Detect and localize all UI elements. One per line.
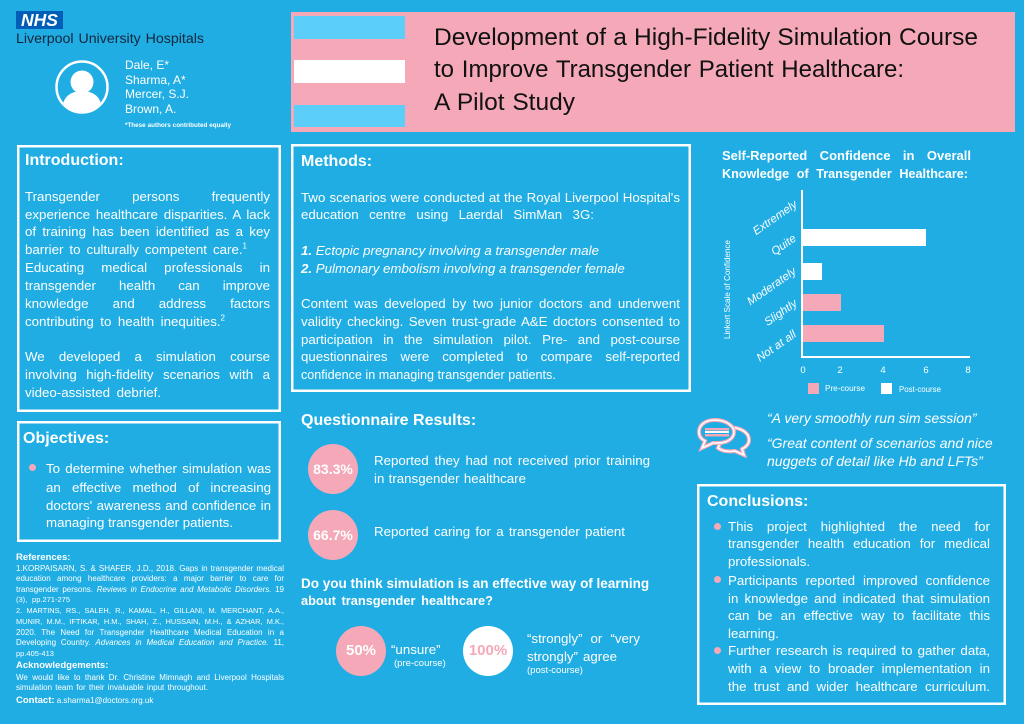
quote [767,435,993,469]
introduction text: transgender health can improve [25,278,270,293]
legend: pre-course: Pre-course [825,383,865,393]
quote: nuggets of detail like Hb and LFTs” [767,453,983,469]
stat note: (pre-course) [394,658,446,669]
stat circle [336,626,386,676]
stat: no prior training [308,444,650,494]
stat circle: 66.7% [313,527,353,543]
trust name: Liverpool University Hospitals [16,31,204,47]
introduction text: barrier to culturally competent care.1 [25,242,247,257]
conclusion text [728,519,990,569]
reference list: pp.405-413 [16,649,54,658]
acknowledgements text [16,673,284,692]
flag stripe: blue [294,105,405,127]
heading: introduction: Introduction: [25,152,124,169]
conclusion text: Participants reported improved confidence [728,573,990,588]
heading: objectives: Objectives: [23,430,109,447]
panel: methods [291,144,691,392]
chart heading [722,148,971,181]
y axis category labels [745,198,801,364]
conclusion text: the trust and wider healthcare curriculum. [728,679,990,694]
methods text: Content was developed by two junior doctors and underwent [301,296,680,311]
introduction text: knowledge and address factors [25,296,270,311]
question text [301,576,649,608]
reference list: Developing Country. Advances in Medical Education and Practice. 11, [16,638,284,647]
title text: A Pilot Study [434,89,575,116]
conclusion text: This project highlighted the need for [728,519,990,534]
stat text: “unsure” [391,642,441,657]
scenario list: 2. Pulmonary embolism involving a transgender female [301,261,625,276]
introduction text [25,189,270,400]
introduction text: contributing to health inequities.2 [25,314,225,329]
chart heading: Knowledge of Transgender Healthcare: [722,167,968,181]
author names: Sharma, A* [125,73,186,87]
y axis category labels: Not at all [755,328,799,364]
y axis category labels: Slightly [762,297,801,329]
stat text: Reported caring for a transgender patient [374,524,625,539]
author names: Brown, A. [125,102,176,116]
reference list: (3), pp.271-275 [16,595,70,604]
y axis category labels: Moderately [745,265,800,308]
objective text [46,461,271,530]
objective text: managing transgender patients. [46,515,233,530]
chart heading: Self-Reported Confidence in Overall [722,148,971,163]
stat circle: 100% [469,642,507,659]
heading: conclusions: Conclusions: [707,493,808,510]
methods text: confidence in managing transgender patients. [301,368,556,382]
question text: about transgender healthcare? [301,593,493,608]
reference list: 1.KORPAISARN, S. & SHAFER, J.D., 2018. Gaps in transgender medical [16,564,284,573]
panel: conclusions [697,484,1006,705]
author names: Mercer, S.J. [125,87,189,101]
methods text: participation in the simulation pilot. Pre- and post-course [301,332,680,347]
heading: acknowledgements: Acknowledgements: [16,660,108,671]
stat note: (post-course) [527,665,583,676]
title text: Development of a High-Fidelity Simulation Course [434,24,978,51]
conclusion text: professionals. [728,554,810,569]
heading: methods: Methods: [301,153,372,170]
stat text: Reported they had not received prior training [374,453,650,468]
stat circle: 83.3% [313,461,353,477]
axes [801,190,970,358]
bars: pre-course [803,294,884,342]
legend: post-course [881,383,941,394]
y axis category labels: Quite [769,233,799,258]
conclusion bullet [714,523,721,530]
NHS logo [16,10,204,47]
introduction text: involving high-fidelity scenarios with a [25,367,270,382]
reference list [16,564,284,658]
scenario list: 1. Ectopic pregnancy involving a transgender male [301,243,599,258]
title banner [291,12,1015,132]
stat: strongly agree post-course [463,626,640,676]
legend: pre-course [808,383,865,394]
reference list: MUNIR, M.M., IFTIKAR, H.M., SHAH, Z., HUSSAIN, M.H., & AZHAR, M.K., [16,617,284,626]
questionnaire results [301,412,650,676]
contact: Contact: a.sharma1@doctors.org.uk [16,695,153,706]
stat: unsure pre-course [336,626,446,676]
stat: strongly agree post-course: strongly” agree [527,649,617,664]
introduction text: Transgender persons frequently [25,189,270,204]
conclusion text: learning. [728,626,779,641]
flag stripe: white [294,60,405,83]
x axis tick labels: 6 [923,365,929,376]
bars: post-course [803,229,926,280]
scenario list [300,243,625,276]
x axis tick labels [800,365,971,376]
panel: introduction [17,145,281,412]
heading: references: References: [16,552,70,563]
conclusion text: transgender health education for medical [728,536,990,551]
reference list: 2. MARTINS, RS., SALEH, R., KAMAL, H., GILLANI, M. MERCHANT, A.A., [16,606,284,615]
introduction text: We developed a simulation course [25,349,270,364]
objective text: an effective method of increasing [46,480,271,495]
heading: questionnaire results: Questionnaire Results: [301,412,476,429]
x axis tick labels: 4 [880,365,886,376]
quote: “Great content of scenarios and nice [767,435,993,451]
y axis title: Linkert Scale of Confidence [722,240,732,339]
stat text: in transgender healthcare [374,471,526,486]
stat circle [308,444,358,494]
conclusion bullet [714,647,721,654]
y axis category labels: Extremely [751,198,801,238]
conclusion text: can be an effective way to facilitate this [728,608,990,623]
stat text: “strongly” or “very [527,631,640,646]
flag stripe: blue [294,16,405,39]
reference list: 2020. The Need for Transgender Healthcare Medical Education in a [16,628,284,637]
acknowledgements text: We would like to thank Dr. Christine Mimnagh and Liverpool Hospitals [16,673,284,682]
icon: speech bubbles [697,418,751,458]
introduction text: of training has been identified as a key [25,224,270,239]
conclusion text: with a view to broader implementation in [728,661,990,676]
panel: objectives [17,421,281,542]
objective bullet [29,464,36,471]
conclusion text [728,643,990,694]
introduction text: video-assisted debrief. [25,385,161,400]
references and acknowledgements [16,552,284,706]
stat circle [308,510,358,560]
introduction text: Educating medical professionals in [25,260,270,275]
author names: Dale, E* [125,58,169,72]
conclusion text [728,573,990,641]
objective text: To determine whether simulation was [46,461,271,476]
quote: “A very smoothly run sim session” [767,410,977,426]
stat circle: 50% [346,642,376,659]
scenario intro text: Two scenarios were conducted at the Royal Liverpool Hospital's [301,190,680,205]
author list [125,58,231,129]
x axis tick labels: 0 [800,365,806,376]
icon: author avatar [55,60,109,114]
reference list: education among healthcare providers: a major barrier to care for [16,574,284,583]
methods text [301,296,680,382]
conclusion text: in knowledge and indicated that simulation [728,591,990,606]
x axis tick labels: 2 [837,365,843,376]
reference list: transgender persons. Reviews in Endocrine and Metabolic Disorders. 19 [16,585,284,594]
acknowledgements text: simulation team for their invaluable input throughout. [16,683,208,692]
title text: to Improve Transgender Patient Healthcare: [434,56,904,83]
x axis tick labels: 8 [965,365,971,376]
stat text [374,453,650,486]
scenario intro text: education centre using Laerdal SimMan 3G: [301,207,594,222]
stat: cared for a transgender patient [308,510,625,560]
methods text: validity checking. Seven trust-grade A&E doctors consented to [301,314,680,329]
participant quotes [767,410,993,469]
question text: Do you think simulation is an effective way of learning [301,576,649,591]
methods text: questionnaires were completed to compare self-reported [301,349,680,364]
author names [125,58,189,116]
stat circle [463,626,513,676]
conclusion bullet [714,576,721,583]
title text [434,24,978,116]
conclusion text: Further research is required to gather data, [728,643,990,658]
equal contribution note: *These authors contributed equally [125,122,231,129]
introduction text: experience healthcare disparities. A lack [25,207,270,222]
legend: post-course: Post-course [899,384,941,394]
scenario intro text [301,190,680,222]
NHS badge: NHS [21,10,58,30]
bar chart [722,190,971,394]
objective text: doctors' awareness and confidence in [46,498,271,513]
